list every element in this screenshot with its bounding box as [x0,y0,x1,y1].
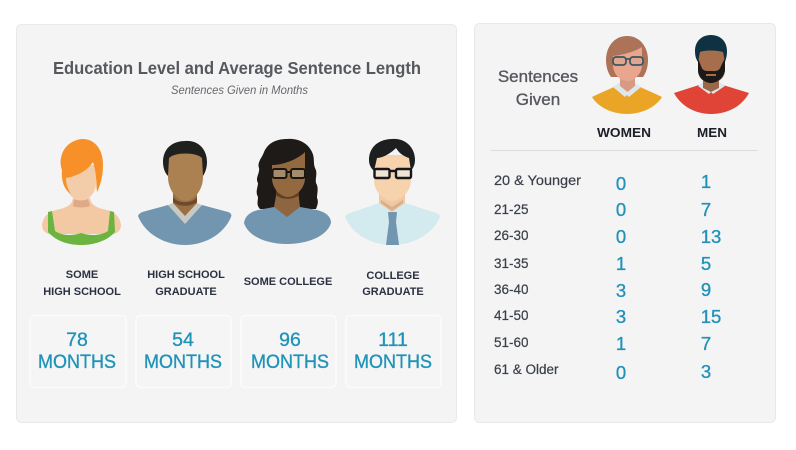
label: college graduate: COLLEGE [366,270,420,282]
stat card: 54 months [136,316,231,388]
row: 21-25: 7 [701,199,711,220]
row: 51-60: 1 [616,333,626,354]
row: 20 & younger: 1 [701,171,711,192]
stat card: 111 months: MONTHS [354,351,432,373]
label: some college: SOME COLLEGE [244,276,332,288]
title: Education Level and Average Sentence Length [53,58,421,78]
row: 21-25: 0 [616,199,626,220]
icon: some high school avatar [42,139,121,245]
row: 61 & older: 61 & Older [494,362,559,377]
stat card: 96 months: MONTHS [251,351,329,373]
row: 51-60 [494,333,711,354]
stat card: 78 months [30,316,126,388]
row: 21-25: 21-25 [494,202,529,217]
stat card: 111 months [346,316,441,388]
panel: sentences given [474,24,776,422]
row: 36-40: 9 [701,279,711,300]
stat card: 78 months: MONTHS [38,351,116,373]
row: 26-30: 0 [616,226,626,247]
stat card: 111 months: 111 [378,329,408,351]
stat card: 54 months: 54 [172,329,194,351]
row: 31-35 [494,253,711,274]
row: 31-35: 5 [701,253,711,274]
row: 26-30 [494,226,721,247]
row: 41-50: 41-50 [494,308,529,323]
heading: Sentences [498,67,578,86]
stat card: 54 months: MONTHS [144,351,222,373]
stat card: 96 months: 96 [279,329,301,351]
row: 61 & older: 3 [701,361,711,382]
row: 36-40: 36-40 [494,282,529,297]
icon: college graduate avatar [345,139,440,245]
row: 41-50: 3 [616,306,626,327]
icon: high school graduate avatar [138,141,231,245]
icon: woman avatar [592,36,662,114]
row: 20 & younger [494,171,711,194]
row: 51-60: 51-60 [494,335,529,350]
row: 61 & older [494,361,711,383]
column heading: men: MEN [697,126,727,140]
row: 26-30: 13 [701,226,721,247]
heading: Given [516,90,560,109]
label: some high school: SOME [66,269,98,281]
row: 51-60: 7 [701,333,711,354]
row: 26-30: 26-30 [494,228,529,243]
label: high school graduate: GRADUATE [155,286,217,298]
column heading: women: WOMEN [597,126,651,140]
label: high school graduate: HIGH SCHOOL [147,269,225,281]
row: 36-40 [494,279,711,301]
icon: man avatar [674,35,749,114]
row: 36-40: 3 [616,280,626,301]
subtitle: Sentences Given in Months [171,85,308,97]
stat card: 96 months [241,316,336,388]
label: some high school: HIGH SCHOOL [43,286,121,298]
panel: education level [16,24,456,422]
row: 31-35: 31-35 [494,256,529,271]
row: 20 & younger: 20 & Younger [494,173,582,188]
row: 21-25 [494,199,711,220]
row: 31-35: 1 [616,253,626,274]
icon: some college avatar [244,139,331,244]
row: 61 & older: 0 [616,362,626,383]
label: college graduate: GRADUATE [362,286,424,298]
row: 41-50: 15 [701,306,721,327]
row: 20 & younger: 0 [616,173,626,194]
stat card: 78 months: 78 [66,329,88,351]
row: 41-50 [494,306,721,327]
